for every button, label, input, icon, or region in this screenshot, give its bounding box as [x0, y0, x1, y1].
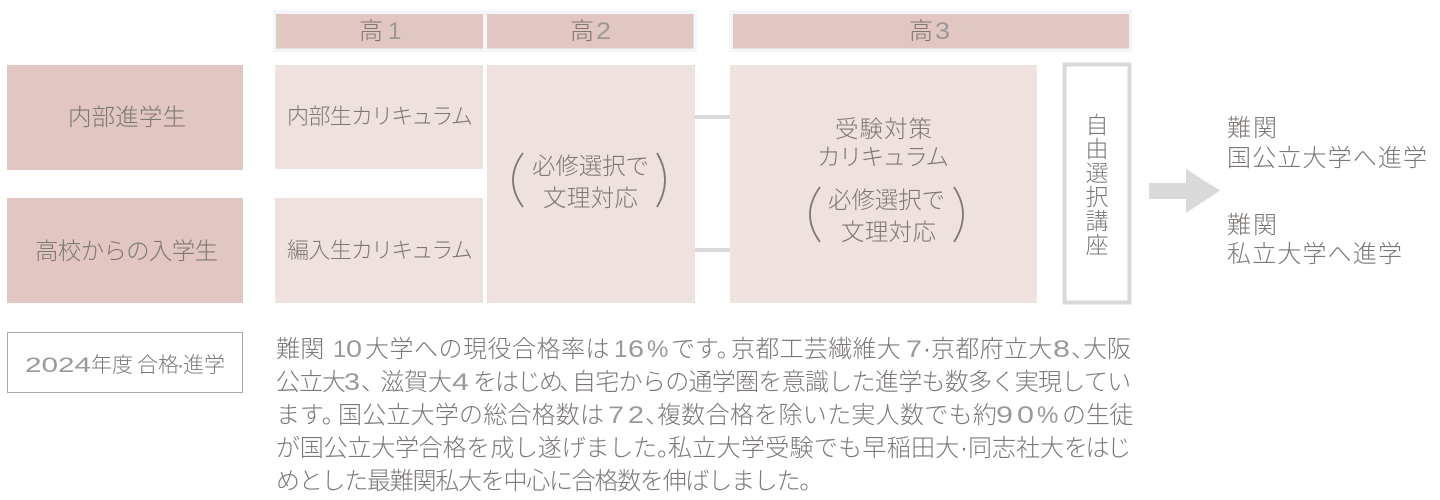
- year header band: 高3: 3: [935, 18, 950, 45]
- label: 2024年度 合格・進学: 進学: [183, 354, 225, 377]
- body text: 国公立大学の総合格数は: [338, 402, 604, 429]
- body text: 1: [333, 336, 346, 363]
- body text: 公立大: [276, 369, 345, 396]
- year header band: 高1 and 高2: 高: [570, 18, 594, 45]
- body text: 0: [346, 336, 362, 363]
- year header band: 高1 and 高2: 高: [359, 18, 383, 45]
- panel: 編入生カリキュラム: [275, 198, 483, 303]
- panel: 受験対策カリキュラム: [730, 65, 1037, 303]
- body text: %: [1037, 402, 1058, 429]
- body text: ます。: [276, 402, 346, 429]
- body text: 複数合格を除いた実人数でも約: [657, 402, 997, 429]
- panel: 受験対策カリキュラム: 文理対応: [841, 219, 936, 245]
- body text: 、: [361, 369, 385, 396]
- panel: 内部生カリキュラム: カリキュラム: [351, 104, 472, 129]
- connector: upper: [695, 115, 730, 119]
- body text: 京都工芸繊維大: [731, 336, 901, 363]
- panel: 自由選択講座: 自: [1086, 112, 1108, 138]
- body text: をはじ: [1064, 435, 1128, 462]
- body text: 京都府立大: [931, 336, 1052, 363]
- body text: 大学への現役合格率は: [365, 336, 610, 363]
- body text: 7: [608, 402, 624, 429]
- body text: 、: [645, 402, 669, 429]
- body text: 大阪: [1083, 336, 1131, 363]
- panel: 自由選択講座: 由: [1086, 136, 1108, 162]
- label: 2024年度 合格・進学: 合格: [137, 354, 179, 377]
- body text: めとした最難関私大を中心に合格数を伸ばしました。: [276, 468, 822, 495]
- arrow: [1149, 169, 1220, 213]
- body text: 4: [452, 369, 469, 396]
- label: 2024年度 合格・進学: ·: [177, 354, 184, 377]
- body text: 7: [906, 336, 922, 363]
- body text: 自宅からの通学圏を意識した進学も数多く実現してい: [572, 369, 1130, 396]
- row label: 高校からの入学生: 高校からの入学生: [35, 238, 218, 264]
- body text: 滋賀大: [380, 369, 452, 396]
- outcome: 国公立大学: 国公立大学へ進学: [1227, 145, 1427, 172]
- body text: 9: [996, 402, 1013, 429]
- body text: %: [647, 336, 668, 363]
- panel: 高2 必修選択で文理対応: 必修選択で: [532, 153, 649, 179]
- body text: 0: [1017, 402, 1034, 429]
- body text: 1: [614, 336, 627, 363]
- year header band: 高1 and 高2: 2: [596, 18, 611, 45]
- body text: [276, 336, 1133, 495]
- panel: 自由選択講座: 座: [1086, 232, 1108, 258]
- row label: 内部進学生: [7, 65, 243, 170]
- body text: 同志社大: [968, 435, 1064, 462]
- outcome: 国公立大学: [1227, 115, 1427, 172]
- label: 2024年度 合格・進学: 年度: [91, 354, 133, 377]
- panel: 受験対策カリキュラム: 必修選択で: [828, 187, 945, 213]
- panel: 受験対策カリキュラム: 受験対策: [835, 116, 932, 142]
- label: 2024年度 合格・進学: 2024: [25, 354, 91, 377]
- body text: 8: [1053, 336, 1070, 363]
- panel: 編入生カリキュラム: 編入生: [287, 238, 351, 263]
- year header band: 高1 and 高2: 1: [388, 18, 401, 45]
- row label: 内部進学生: 内部進学生: [68, 104, 186, 130]
- year header band: 高3: [729, 10, 1132, 52]
- body text: 、: [559, 369, 583, 396]
- panel: 高2 必修選択で文理対応: [487, 65, 695, 303]
- outcome: 国公立大学: 難関: [1227, 115, 1277, 142]
- outcome: 私立大学: 難関: [1227, 212, 1277, 239]
- panel: 自由選択講座: 選: [1086, 160, 1108, 186]
- body text: ·: [923, 336, 931, 363]
- year header band: 高3: 高: [909, 18, 933, 45]
- panel: 自由選択講座: 講: [1086, 208, 1108, 234]
- body text: 、: [1071, 336, 1095, 363]
- year header band: 高1 and 高2: [273, 10, 697, 52]
- body text: の生徒: [1062, 402, 1133, 429]
- panel: 自由選択講座: 択: [1086, 184, 1108, 210]
- row label: 高校からの入学生: [7, 198, 243, 303]
- body text: 私立大学受験でも早稲田大: [668, 435, 960, 462]
- panel: 内部生カリキュラム: 内部生: [287, 104, 351, 129]
- label: 2024年度 合格・進学: [8, 332, 242, 392]
- body text: です。: [671, 336, 741, 363]
- panel: 内部生カリキュラム: [275, 65, 483, 169]
- body text: が国公立大学合格を成し遂げました: [276, 435, 657, 462]
- panel: 編入生カリキュラム: カリキュラム: [351, 238, 472, 263]
- outcome: 私立大学: [1227, 212, 1402, 268]
- body text: 6: [628, 336, 644, 363]
- body text: 3: [344, 369, 360, 396]
- body text: 2: [628, 402, 644, 429]
- outcome: 私立大学: 私立大学へ進学: [1227, 241, 1402, 268]
- panel: 自由選択講座: [1064, 64, 1130, 302]
- panel: 高2 必修選択で文理対応: 文理対応: [543, 185, 638, 211]
- connector: lower: [695, 248, 730, 252]
- body text: 。: [657, 435, 681, 462]
- body text: 難関: [276, 336, 325, 363]
- panel: 受験対策カリキュラム: カリキュラム: [817, 144, 949, 170]
- body text: をはじめ: [473, 369, 561, 396]
- body text: ·: [960, 435, 968, 462]
